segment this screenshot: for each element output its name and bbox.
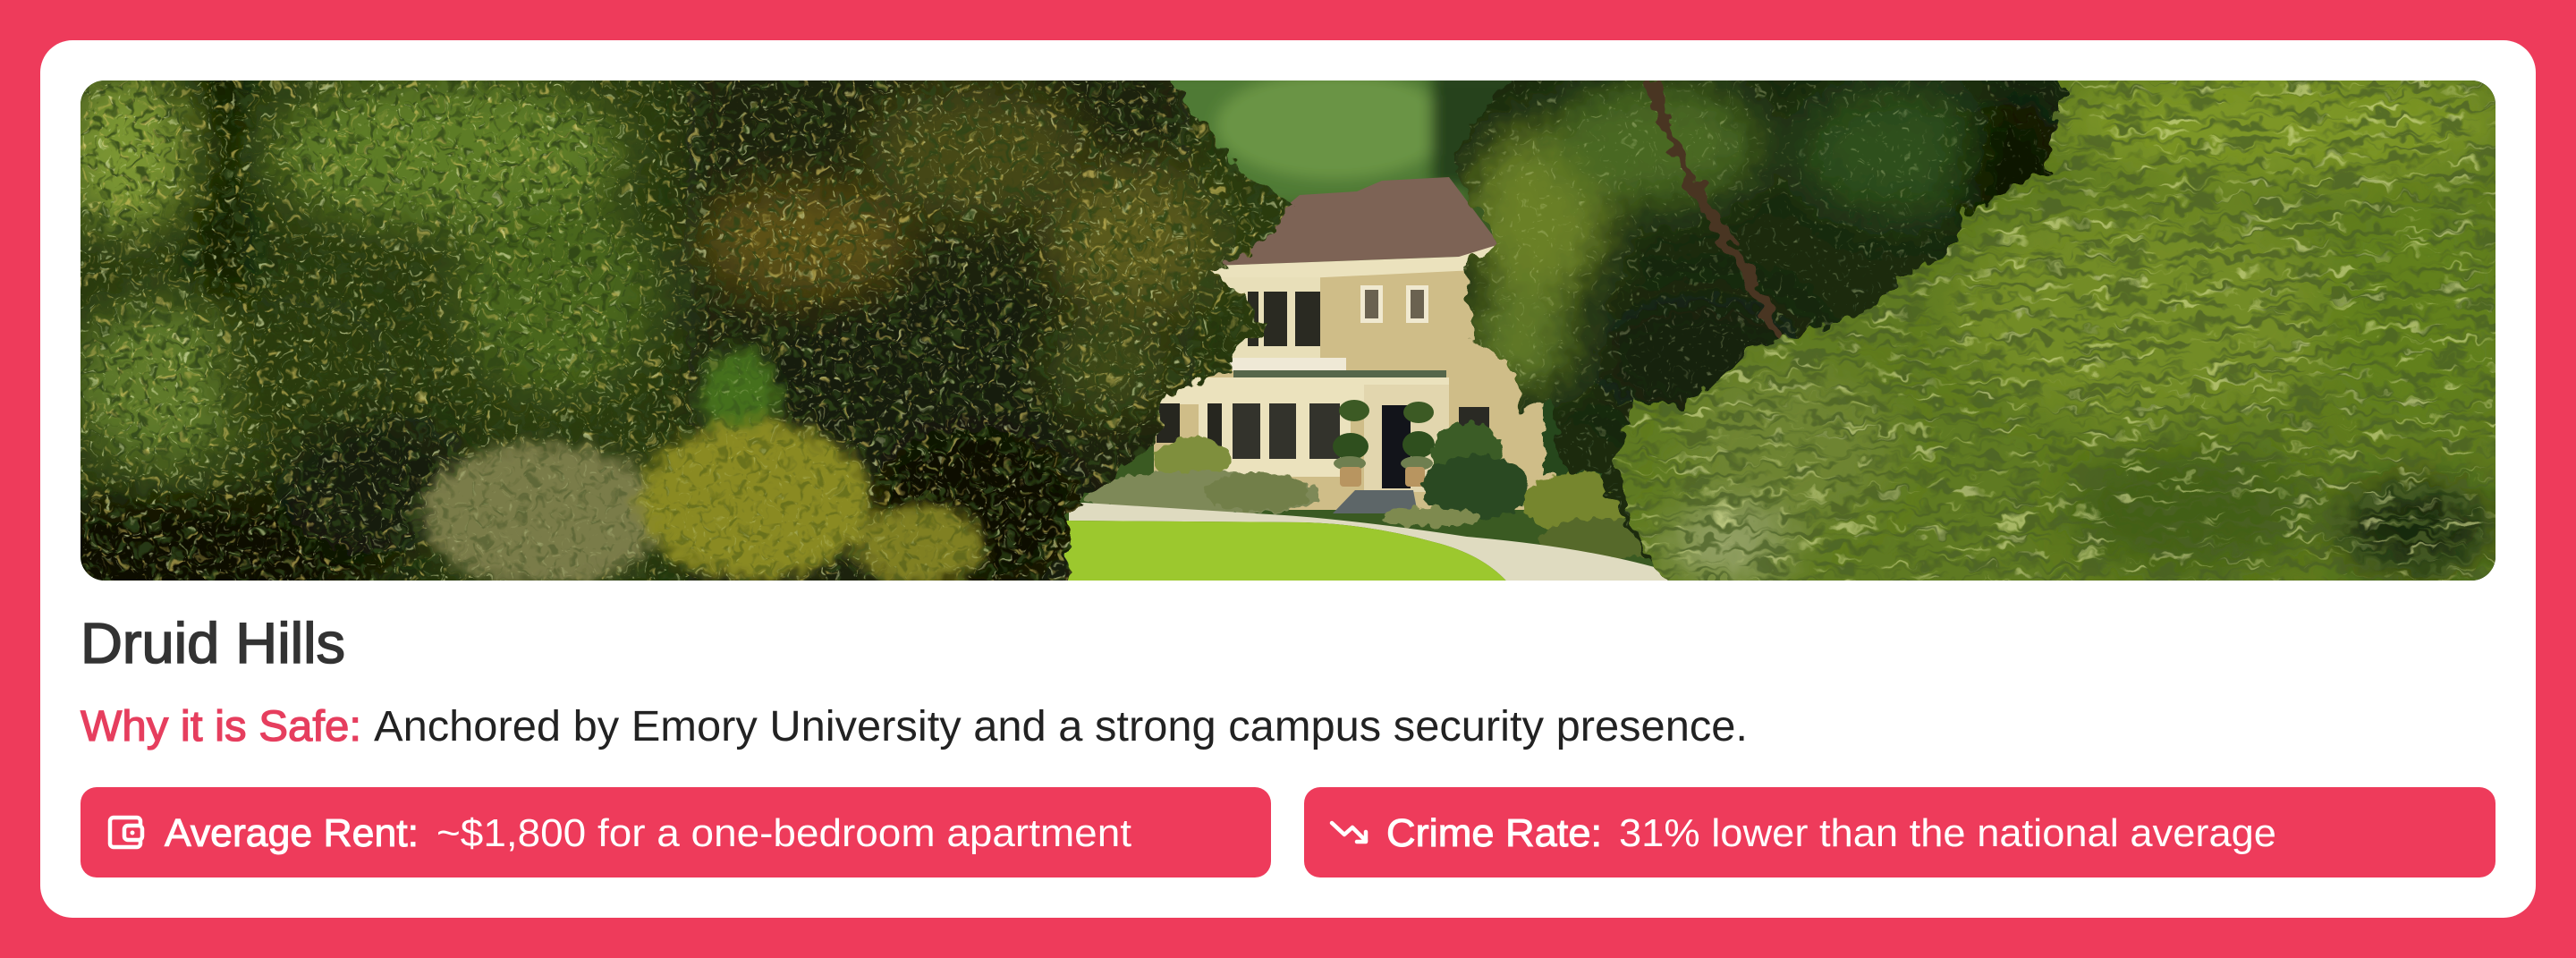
right tree and fern: [1454, 81, 2496, 581]
steps: [1333, 490, 1418, 513]
garden beds and shrubs: [1087, 394, 1682, 558]
left trees and magnolia: [80, 81, 1295, 581]
background trees: [1170, 81, 1512, 202]
description text: Anchored by Emory University and a strong campus security presence.: [374, 703, 1748, 750]
driveway: [1069, 503, 1682, 586]
icon: trending down arrow: [1332, 823, 1366, 842]
topiary: [1333, 400, 1435, 487]
panel: average rent: [80, 787, 1271, 877]
icon: wallet: [110, 818, 142, 847]
foreground shrubs: [421, 349, 984, 587]
tree trunk: [1651, 82, 1783, 344]
house: [1154, 177, 1556, 510]
photo: house among trees: [80, 81, 2496, 581]
crime value: 31% lower than the national average: [1619, 811, 2276, 855]
title: Druid Hills: [80, 611, 345, 675]
label: why it is safe: Why it is Safe:: [80, 703, 361, 750]
description: [80, 703, 1748, 750]
rent label: Average Rent:: [165, 811, 419, 855]
panel: crime rate: [1304, 787, 2496, 877]
rent value: ~$1,800 for a one-bedroom apartment: [436, 811, 1131, 855]
crime label: Crime Rate:: [1386, 811, 1602, 855]
fern foliage: [1612, 81, 2496, 581]
lawn: [1064, 521, 1511, 586]
